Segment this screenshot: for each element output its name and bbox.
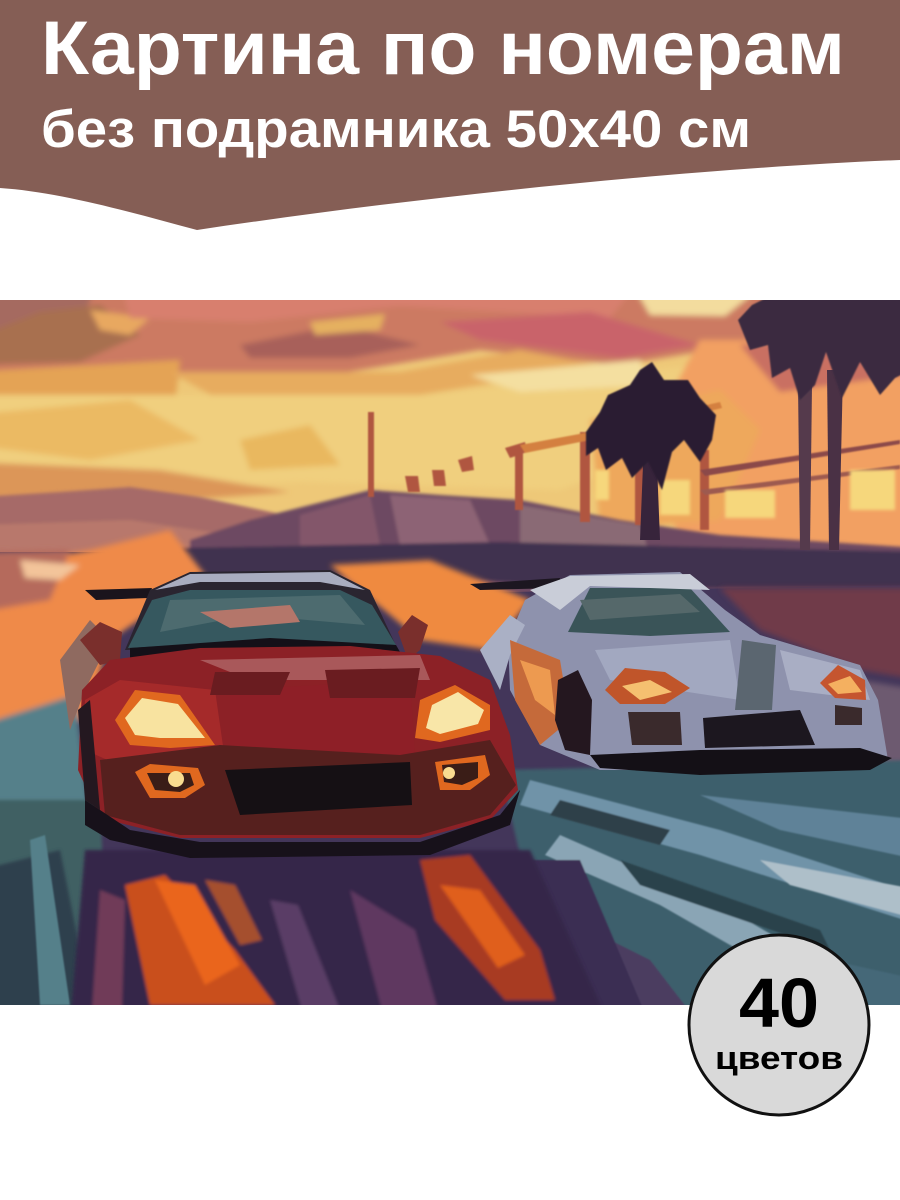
- palm trees: [586, 296, 900, 550]
- distant hills: [0, 487, 900, 600]
- red car: [60, 570, 520, 858]
- silver car: [470, 572, 892, 775]
- silver car grille: [703, 710, 815, 748]
- silver car windshield: [568, 588, 730, 636]
- red car headlight right: [415, 685, 490, 742]
- reflection of red car: [70, 848, 599, 1005]
- ground background: [0, 530, 900, 1025]
- silver car headlights: [605, 668, 690, 704]
- red car fog lights: [135, 764, 205, 798]
- fence lights: [595, 470, 895, 518]
- title: Картина по номерам: [41, 6, 845, 91]
- badge number: 40: [739, 964, 819, 1042]
- silver car stripes: [595, 640, 740, 700]
- road streaks: [520, 780, 900, 1005]
- red car body: [78, 646, 518, 838]
- fence posts: [368, 402, 900, 530]
- red car windshield: [128, 590, 396, 648]
- badge label: цветов: [715, 1040, 843, 1076]
- palm: middle: [586, 362, 716, 540]
- red car lower bumper: [100, 740, 516, 835]
- palm: right pair: [738, 296, 900, 550]
- red car headlight left: [115, 690, 215, 748]
- subtitle: без подрамника 50х40 см: [41, 100, 751, 159]
- sky: [0, 300, 900, 549]
- red car roof: [125, 570, 398, 650]
- header banner: [0, 0, 900, 230]
- painting: two race cars at sunset: [0, 280, 900, 1025]
- badge: 40 colours: [689, 935, 869, 1115]
